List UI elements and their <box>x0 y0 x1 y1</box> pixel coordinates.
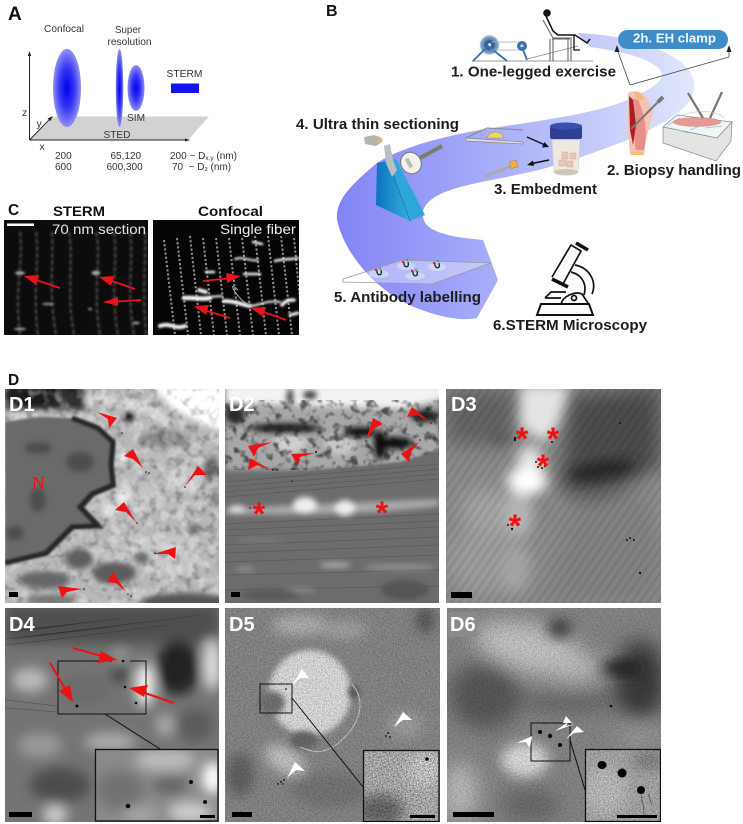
inset image <box>95 749 224 824</box>
red asterisks <box>508 428 560 527</box>
red asterisks: * <box>547 421 560 457</box>
panel label: D4 <box>9 614 35 636</box>
icon: resin block holder <box>484 160 518 177</box>
icon: chair and person <box>543 9 590 61</box>
panel D4: micrograph with inset <box>5 604 224 824</box>
pill label: 2h. EH clamp <box>633 32 716 46</box>
icon: microscope <box>537 243 594 315</box>
overlay text: Single fiber: Single fiber <box>220 221 296 237</box>
red asterisks: * <box>376 495 389 531</box>
clamp arrows <box>617 49 729 85</box>
label 1: 1. One-legged exercise <box>451 64 616 80</box>
axis and technique labels: Super <box>115 24 141 36</box>
axis and technique labels: STERM <box>166 68 202 80</box>
inset region box <box>531 723 570 761</box>
panel label background <box>448 612 477 637</box>
axes <box>28 51 190 142</box>
resolution values: 200 <box>55 151 72 162</box>
axis and technique labels <box>22 23 202 153</box>
arrowheads: confocal <box>194 273 266 317</box>
icon: exercise ergometer <box>472 36 593 61</box>
scale bar <box>451 592 472 598</box>
red asterisks <box>252 502 388 515</box>
resolution values: (nm) <box>208 162 231 173</box>
heading: B: B <box>326 3 338 20</box>
resolution values: (nm) <box>214 151 237 162</box>
scale bar <box>7 224 34 226</box>
label 2: 2. Biopsy handling <box>607 162 741 179</box>
inset image <box>362 750 440 822</box>
nucleus label: N <box>32 473 45 493</box>
label 3: 3. Embedment <box>494 182 597 198</box>
scale bar <box>9 592 18 597</box>
resolution values: 70 ~ D <box>172 162 205 173</box>
resolution values: 65,120 <box>110 151 142 162</box>
panel B: workflow <box>296 3 741 334</box>
pill: 2h EH clamp <box>618 30 728 49</box>
panel label: D6 <box>450 614 476 636</box>
scale bar <box>453 812 494 817</box>
image: STERM section <box>4 220 148 335</box>
label 4: 4. Ultra thin sectioning <box>296 116 459 133</box>
panel label: D3 <box>451 394 477 416</box>
red arrows: confocal <box>201 278 286 320</box>
panel A: resolution comparison <box>8 4 237 173</box>
red arrows <box>50 648 174 703</box>
scale bar <box>232 812 252 817</box>
label 5: 5. Antibody labelling <box>334 289 481 306</box>
heading: D: D <box>8 372 19 389</box>
red arrowheads <box>248 407 430 470</box>
red asterisks: * <box>253 496 266 532</box>
overlay text: 70 nm section: 70 nm section <box>52 221 146 237</box>
panel D5: vesicle micrograph with inset <box>225 606 443 824</box>
confocal volume <box>53 49 81 127</box>
STED volume <box>116 49 123 127</box>
resolution values: 600 <box>55 162 72 173</box>
red arrowtips <box>59 651 148 702</box>
panel C: fluorescence images <box>4 202 300 335</box>
red arrows: STERM <box>30 278 141 302</box>
red arrowheads <box>58 412 207 598</box>
arrowheads <box>614 45 732 52</box>
red asterisks: * <box>537 448 550 484</box>
icon: specimen jar <box>550 122 582 175</box>
heading: C: C <box>8 202 19 219</box>
icon: glass slide with antibodies <box>343 259 491 284</box>
panel label: D1 <box>9 394 35 416</box>
icon: embedding mould <box>466 128 523 144</box>
heading: Confocal: Confocal <box>198 203 263 219</box>
inset connector <box>292 698 363 787</box>
white arrowheads <box>287 669 412 778</box>
resolution values: x,y <box>205 155 214 162</box>
resolution values <box>55 151 237 173</box>
inset region box <box>58 661 146 714</box>
heading: A: A <box>8 4 22 25</box>
inset image <box>583 749 668 822</box>
inset connector <box>105 714 160 749</box>
red asterisks: * <box>516 421 529 457</box>
axis and technique labels: STED <box>104 129 131 141</box>
icon: leg biopsy <box>628 91 663 155</box>
SIM volume <box>128 65 144 111</box>
resolution values: z <box>205 166 208 173</box>
STERM volume <box>171 84 199 93</box>
heading: STERM: STERM <box>53 203 105 219</box>
panel D2: subsarcolemmal micrograph <box>225 385 445 603</box>
resolution values: 200 ~ D <box>170 151 205 162</box>
white arrowheads <box>517 716 584 748</box>
red asterisks: * <box>509 508 522 544</box>
icon: ice box with sample <box>663 92 732 161</box>
ribbon <box>337 33 694 319</box>
panel label: D2 <box>229 394 255 416</box>
axis and technique labels: y <box>36 118 42 130</box>
arrows: embedding steps <box>527 137 549 166</box>
scale bar <box>9 812 32 817</box>
scale bar <box>231 592 240 597</box>
axis and technique labels: resolution <box>108 36 152 48</box>
axis and technique labels: Confocal <box>44 23 84 35</box>
icon: ultramicrotome <box>364 135 442 221</box>
axis and technique labels: SIM <box>127 112 145 124</box>
panel label: D5 <box>229 614 255 636</box>
inset region box <box>260 684 292 713</box>
resolution values: 600,300 <box>106 162 143 173</box>
axis and technique labels: x <box>40 141 46 153</box>
panel D3: intermyofibrillar micrograph <box>446 385 672 603</box>
axis and technique labels: z <box>22 107 27 119</box>
image: confocal single fiber <box>153 220 300 335</box>
arrowheads: STERM <box>24 275 118 306</box>
panel D6: micrograph with inset <box>442 608 668 822</box>
label 6: 6.STERM Microscopy <box>493 317 648 334</box>
focal plane <box>30 116 209 140</box>
inset connector <box>570 740 585 790</box>
panel D1: nucleus micrograph <box>5 385 229 611</box>
